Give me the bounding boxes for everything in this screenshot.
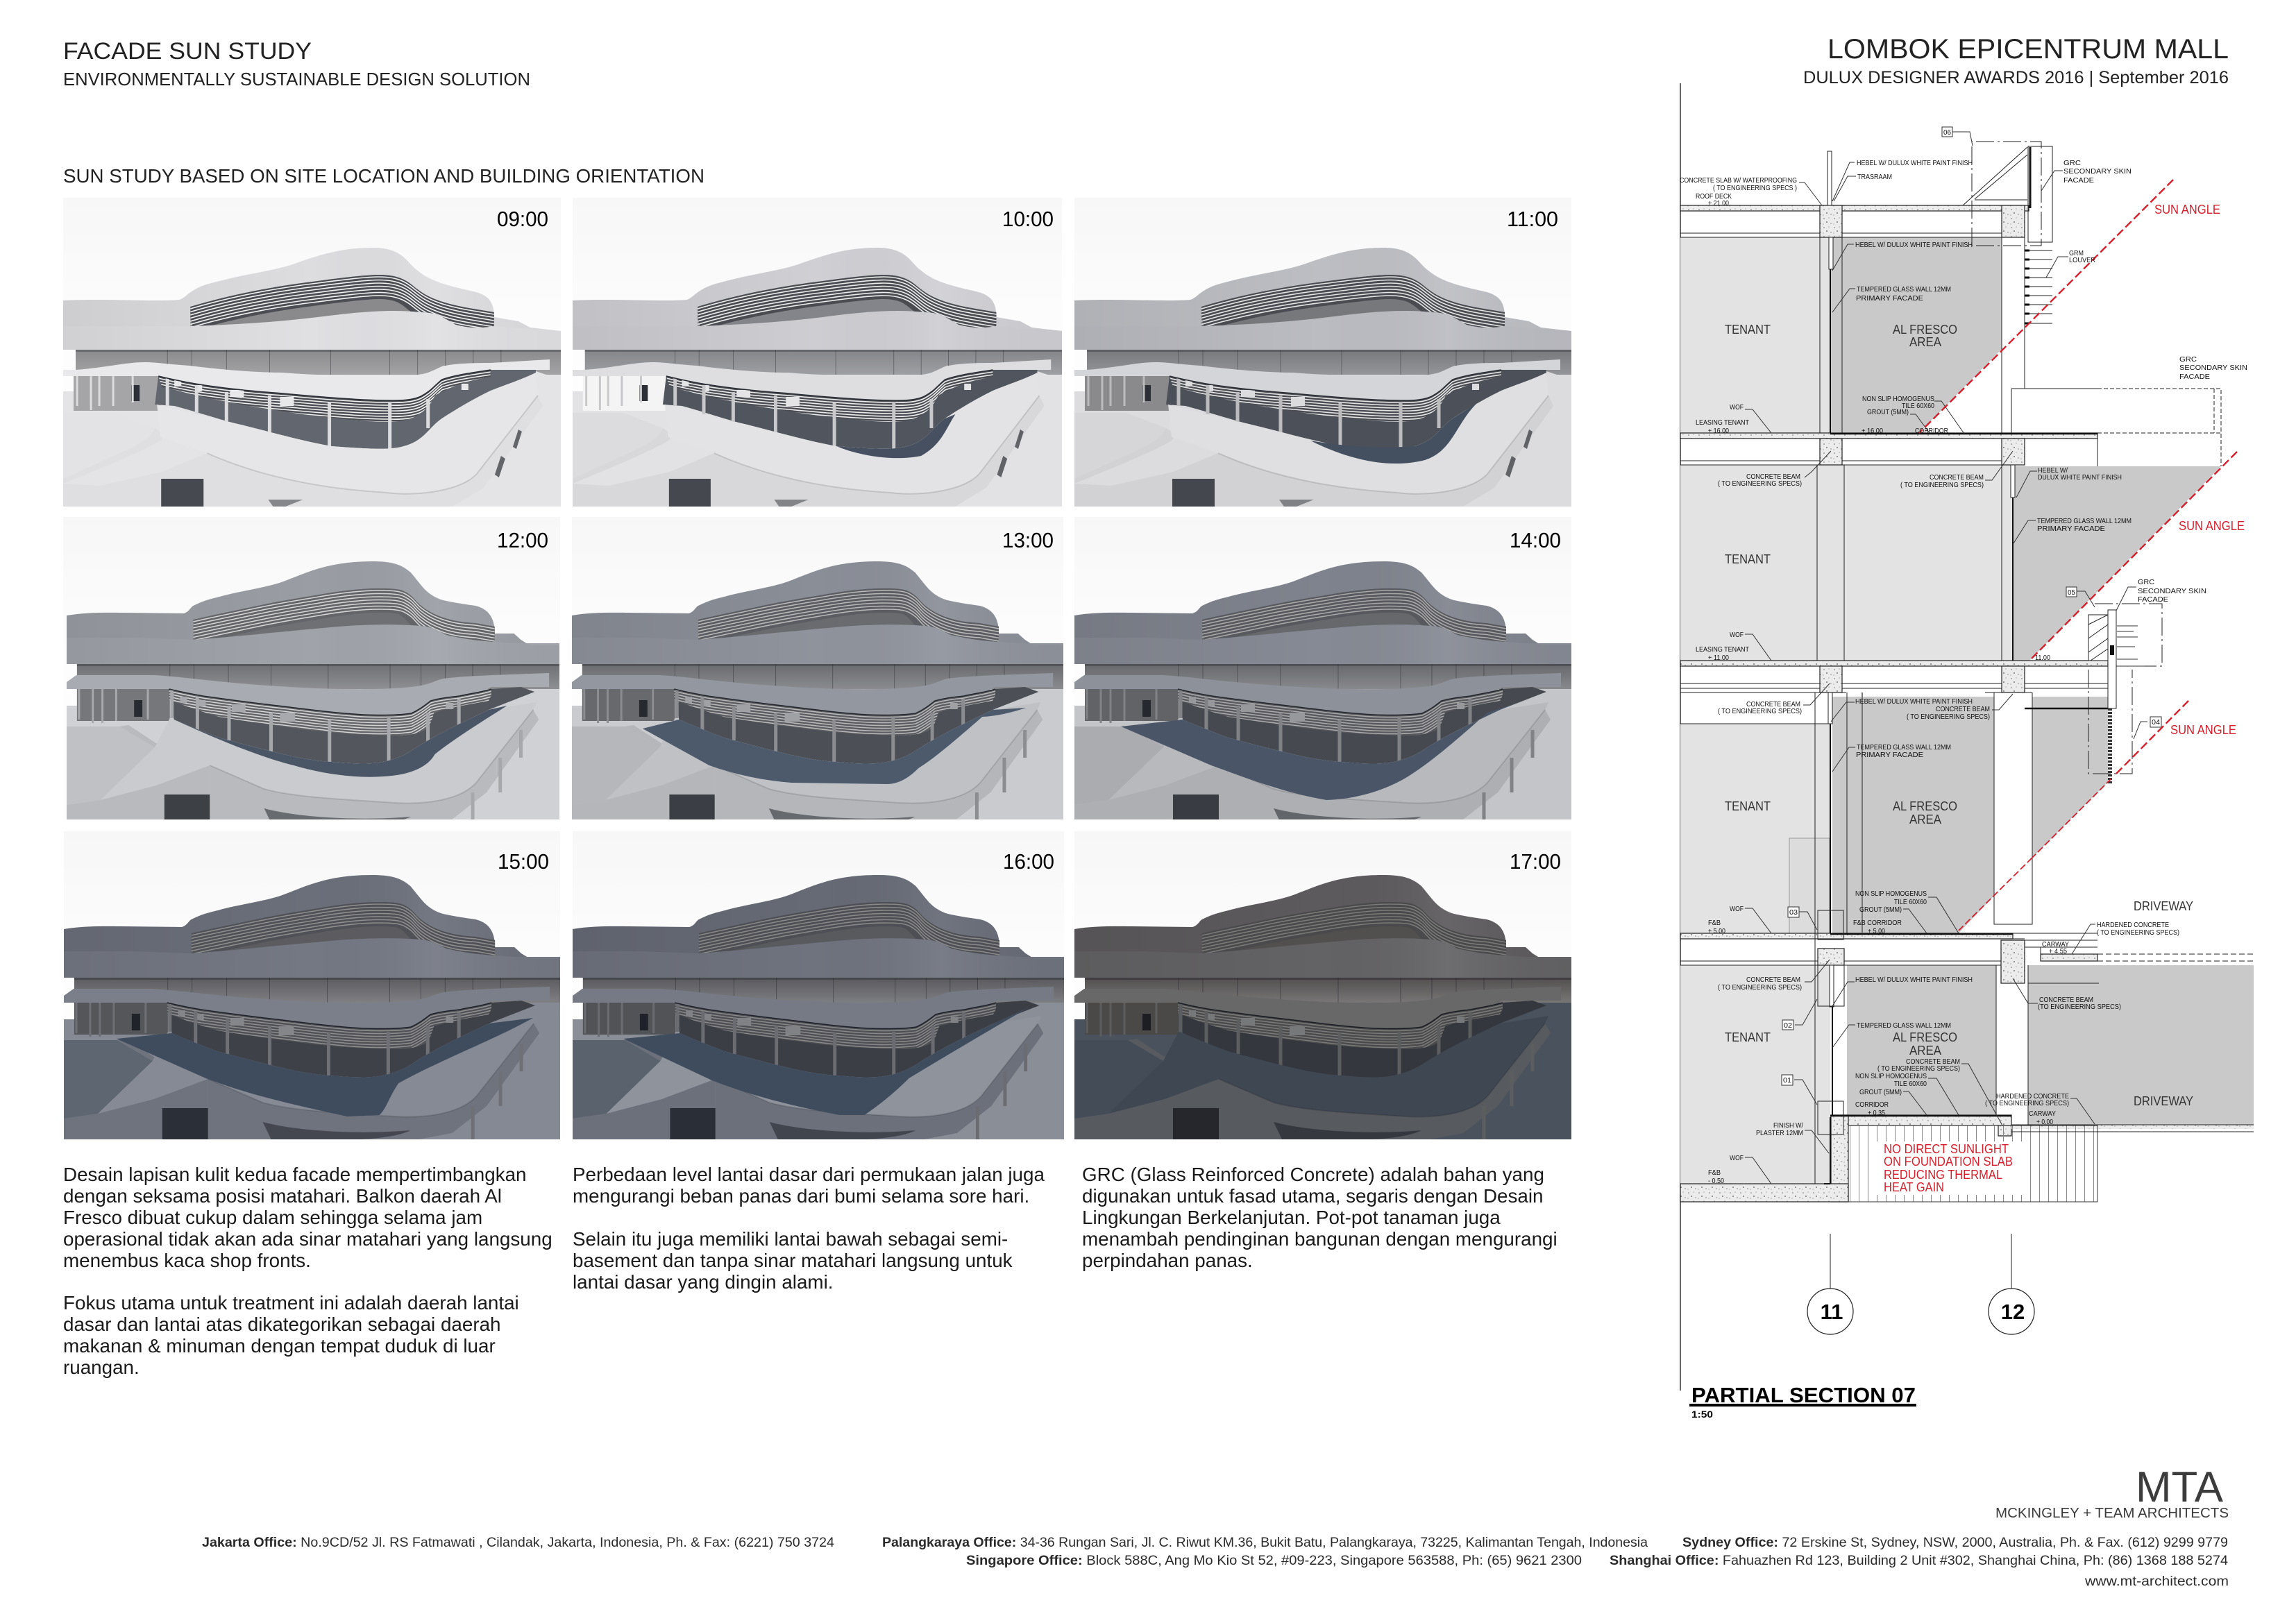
- panel: render 17:00: 17:00: [1510, 849, 1561, 874]
- title: facade sun study: [63, 38, 530, 90]
- logo: MTA: [1995, 1463, 2229, 1521]
- big space labels: DRIVEWAY: [2134, 899, 2193, 913]
- footer: office addresses: www.mt-architect.com: [2084, 1574, 2229, 1589]
- annotation labels: WOF: [1730, 1155, 1744, 1162]
- text block: column 1: dasar dan lantai atas dikategorikan sebagai daerah: [63, 1314, 501, 1335]
- annotation labels: + 21.00: [1708, 200, 1729, 207]
- annotation labels: GRC: [2179, 356, 2197, 364]
- title: project name and award: DULUX DESIGNER AWARDS 2016 | September 2016: [1803, 68, 2229, 87]
- panel: render 11:00: [1074, 198, 1571, 507]
- annotation labels: + 0.00: [2036, 1119, 2053, 1126]
- red note: [1884, 1142, 2013, 1194]
- annotation labels: HARDENED CONCRETE: [2097, 921, 2169, 929]
- annotation labels: CONCRETE SLAB W/ WATERPROOFING: [1680, 177, 1797, 185]
- text block: column 2: Selain itu juga memiliki lantai bawah sebagai semi-: [573, 1228, 1008, 1250]
- text block: column 3: digunakan untuk fasad utama, segaris dengan Desain: [1082, 1185, 1544, 1207]
- annotation labels: PRIMARY FACADE: [2037, 525, 2105, 533]
- annotation labels: + 16.00: [1862, 427, 1883, 435]
- big space labels: TENANT: [1725, 552, 1771, 566]
- annotation labels: HEBEL W/ DULUX WHITE PAINT FINISH: [1855, 698, 1973, 706]
- title: facade sun study: FACADE SUN STUDY: [63, 38, 312, 65]
- annotation labels: ( TO ENGINEERING SPECS): [1985, 1100, 2069, 1107]
- annotation labels: TILE 60X60: [1902, 402, 1934, 410]
- annotation labels: GROUT (5MM): [1859, 1089, 1902, 1096]
- annotation labels: NON SLIP HOMOGENUS: [1862, 396, 1934, 403]
- annotation labels: + 11.00: [1708, 654, 1729, 662]
- tag numbers: 03: [1789, 909, 1798, 917]
- big space labels: AL FRESCO: [1893, 1030, 1957, 1044]
- annotation labels: CONCRETE BEAM: [1746, 976, 1800, 984]
- big space labels: [1725, 323, 2193, 1108]
- hebel walls, GRC skin and louvers: [1827, 142, 2221, 1007]
- annotation labels: TEMPERED GLASS WALL 12MM: [1857, 744, 1951, 751]
- annotation labels: (TO ENGINEERING SPECS): [2038, 1003, 2121, 1011]
- annotation labels: F&B CORRIDOR: [1853, 919, 1902, 927]
- panel: render 14:00: 14:00: [1510, 528, 1561, 552]
- annotation labels: TILE 60X60: [1894, 899, 1927, 906]
- text block: column 1: menembus kaca shop fronts.: [63, 1250, 311, 1271]
- annotation labels: ( TO ENGINEERING SPECS): [1907, 713, 1990, 721]
- tag numbers: 04: [2152, 719, 2160, 726]
- logo: MTA: MCKINGLEY + TEAM ARCHITECTS: [1995, 1506, 2229, 1521]
- title: project name and award: [1803, 34, 2229, 87]
- panel: render 16:00: 16:00: [1003, 849, 1054, 874]
- text block: column 2: lantai dasar yang dingin alami.: [573, 1271, 833, 1293]
- big space labels: AL FRESCO: [1893, 323, 1957, 337]
- annotation labels: FACADE: [2138, 596, 2168, 604]
- annotation labels: CONCRETE BEAM: [1936, 706, 1990, 713]
- panel: render 12:00: 12:00: [497, 528, 548, 552]
- lower sun angle line: [1959, 779, 2111, 931]
- big space labels: DRIVEWAY: [2134, 1094, 2193, 1108]
- annotation labels: F&B: [1708, 919, 1721, 927]
- annotation labels: WOF: [1730, 631, 1744, 639]
- text block: column 3: GRC (Glass Reinforced Concrete) adalah bahan yang: [1082, 1164, 1544, 1185]
- annotation labels: FACADE: [2179, 373, 2210, 381]
- chart: partial section drawing: [1680, 83, 2254, 1391]
- big space labels: TENANT: [1725, 1030, 1771, 1044]
- text block: column 1: Desain lapisan kulit kedua facade mempertimbangkan: [63, 1164, 527, 1185]
- panel: render 13:00: [572, 517, 1063, 827]
- red note: ON FOUNDATION SLAB: [1884, 1155, 2013, 1169]
- text block: column 1: dengan seksama posisi matahari. Balkon daerah Al: [63, 1185, 502, 1207]
- structural lines: [1680, 233, 2254, 1184]
- footer: office addresses: Singapore Office: Block 588C, Ang Mo Kio St 52, #09-223, Singapore 563588, Ph: (65) 9621 2300: [966, 1554, 1582, 1568]
- panel: render 17:00: [1074, 831, 1571, 1141]
- big space labels: TENANT: [1725, 799, 1771, 813]
- text block: column 3: Lingkungan Berkelanjutan. Pot-pot tanaman juga: [1082, 1207, 1501, 1228]
- annotation labels: NON SLIP HOMOGENUS: [1855, 890, 1927, 898]
- red sun angle labels: SUN ANGLE: [2170, 723, 2236, 737]
- footer: office addresses: Jakarta Office: No.9CD/52 Jl. RS Fatmawati , Cilandak, Jakarta, Indonesia, Ph. & Fax: (6221) 750 3724: [202, 1536, 834, 1550]
- annotation labels: PRIMARY FACADE: [1856, 295, 1923, 303]
- annotation labels: DULUX WHITE PAINT FINISH: [2038, 474, 2122, 482]
- grid bubble 12: 12: [2001, 1300, 2025, 1324]
- annotation labels: CONCRETE BEAM: [2039, 996, 2093, 1004]
- leaders: [1745, 132, 2147, 1184]
- annotation labels: PLASTER 12MM: [1756, 1130, 1803, 1137]
- footer: office addresses: Sydney Office: 72 Erskine St, Sydney, NSW, 2000, Australia, Ph. & Fax. (612) 9299 9779: [1682, 1536, 2228, 1550]
- grid bubble 11: [1807, 1234, 1853, 1334]
- drawing title: 1:50: [1691, 1409, 1713, 1420]
- annotation labels: GROUT (5MM): [1859, 906, 1902, 914]
- annotation labels: + 0.35: [1868, 1110, 1885, 1117]
- footer: office addresses: [202, 1536, 2229, 1589]
- big space labels: AL FRESCO: [1893, 799, 1957, 813]
- panel: render 10:00: 10:00: [1002, 207, 1054, 231]
- annotation labels: ROOF DECK: [1696, 193, 1732, 201]
- annotation labels: LEASING TENANT: [1696, 646, 1749, 654]
- footer: office addresses: Palangkaraya Office: 34-36 Rungan Sari, Jl. C. Riwut KM.36, Bukit Batu, Palangkaraya, 73225, Kalimantan Tengah, Indonesia: [882, 1536, 1648, 1550]
- panel: render 14:00: [1074, 517, 1571, 827]
- red note: HEAT GAIN: [1884, 1180, 1944, 1194]
- annotation labels: LEASING TENANT: [1696, 419, 1749, 427]
- text block: column 1: operasional tidak akan ada sinar matahari yang langsung: [63, 1228, 552, 1250]
- annotation labels: WOF: [1730, 404, 1744, 411]
- annotation labels: CARWAY: [2029, 1110, 2056, 1118]
- concrete slabs and beams: [1680, 205, 2254, 1202]
- tags: [1782, 127, 2161, 1085]
- red sun angle labels: SUN ANGLE: [2154, 203, 2220, 216]
- big space labels: TENANT: [1725, 323, 1771, 337]
- title: project name and award: LOMBOK EPICENTRUM MALL: [1827, 34, 2229, 65]
- annotation labels: HEBEL W/ DULUX WHITE PAINT FINISH: [1855, 241, 1973, 249]
- annotation labels: F&B: [1708, 1169, 1721, 1177]
- panel: render 16:00: [573, 831, 1064, 1141]
- annotation labels: GROUT (5MM): [1867, 409, 1909, 416]
- annotation labels: GRC: [2063, 160, 2081, 167]
- annotation labels: ( TO ENGINEERING SPECS): [1718, 984, 1802, 992]
- annotation labels: - 0.50: [1708, 1178, 1724, 1185]
- panel: render 09:00: [63, 198, 561, 507]
- grid bubble 11: 11: [1821, 1300, 1843, 1324]
- panel: render 11:00: 11:00: [1507, 207, 1558, 231]
- text block: column 1: [63, 1164, 552, 1378]
- text block: column 3: [1082, 1164, 1558, 1271]
- annotation labels: ( TO ENGINEERING SPECS): [1900, 482, 1984, 489]
- annotation labels: FACADE: [2063, 177, 2094, 185]
- annotation labels: CONCRETE BEAM: [1906, 1058, 1960, 1066]
- text block: column 3: menambah pendinginan bangunan dengan mengurangi: [1082, 1228, 1558, 1250]
- annotation labels: HEBEL W/ DULUX WHITE PAINT FINISH: [1857, 160, 1973, 167]
- footer: office addresses: Shanghai Office: Fahuazhen Rd 123, Building 2 Unit #302, Shanghai China, Ph: (86) 1368 188 5274: [1610, 1554, 2228, 1568]
- annotation labels: CONCRETE BEAM: [1746, 701, 1800, 708]
- text block: column 1: Fresco dibuat cukup dalam sehingga selama jam: [63, 1207, 482, 1228]
- annotation labels: [1680, 160, 2247, 1185]
- big space labels: AREA: [1909, 813, 1941, 826]
- annotation labels: SECONDARY SKIN: [2179, 364, 2247, 372]
- tag numbers: 02: [1784, 1022, 1792, 1030]
- annotation labels: TEMPERED GLASS WALL 12MM: [1857, 1022, 1951, 1030]
- tag numbers: 01: [1783, 1077, 1791, 1085]
- annotation labels: 11.00: [2035, 654, 2050, 662]
- panel: render 12:00: [63, 517, 560, 827]
- annotation labels: GRM: [2069, 250, 2084, 257]
- annotation labels: SECONDARY SKIN: [2138, 588, 2206, 595]
- annotation labels: GRC: [2138, 579, 2154, 586]
- annotation labels: SECONDARY SKIN: [2063, 168, 2132, 176]
- annotation labels: TRASRAAM: [1857, 173, 1892, 181]
- red sun angle labels: SUN ANGLE: [2179, 519, 2245, 533]
- text block: column 2: mengurangi beban panas dari bumi selama sore hari.: [573, 1185, 1029, 1207]
- annotation labels: CARWAY: [2042, 941, 2069, 949]
- annotation labels: HEBEL W/ DULUX WHITE PAINT FINISH: [1855, 976, 1973, 984]
- text block: column 1: makanan & minuman dengan tempat duduk di luar: [63, 1335, 496, 1357]
- panel: render 15:00: 15:00: [498, 849, 549, 874]
- annotation labels: CORRIDOR: [1855, 1101, 1889, 1109]
- annotation labels: TEMPERED GLASS WALL 12MM: [1857, 286, 1951, 294]
- panel: render 13:00: 13:00: [1002, 528, 1054, 552]
- text block: column 2: [573, 1164, 1045, 1293]
- drawing title: [1689, 1383, 1916, 1420]
- logo: MTA: MTA: [2136, 1463, 2224, 1511]
- annotation labels: CONCRETE BEAM: [1930, 474, 1984, 482]
- panel: render 10:00: [573, 198, 1062, 507]
- annotation labels: LOUVER: [2069, 257, 2095, 264]
- red note: REDUCING THERMAL: [1884, 1168, 2002, 1182]
- annotation labels: CONCRETE BEAM: [1746, 473, 1800, 481]
- title: facade sun study: ENVIRONMENTALLY SUSTAINABLE DESIGN SOLUTION: [63, 69, 530, 90]
- text block: column 1: ruangan.: [63, 1357, 140, 1378]
- callout boxes: [1818, 910, 1844, 1135]
- annotation labels: ( TO ENGINEERING SPECS): [1718, 480, 1802, 488]
- drawing title: PARTIAL SECTION 07: [1691, 1383, 1916, 1407]
- tag numbers: 05: [2068, 589, 2075, 597]
- big space labels: AREA: [1909, 1044, 1941, 1057]
- fills: tenant and al fresco shading: [1680, 237, 2254, 1184]
- panel: render 09:00: 09:00: [497, 207, 548, 231]
- annotation labels: PRIMARY FACADE: [1856, 751, 1923, 759]
- annotation labels: + 4.55: [2049, 948, 2067, 955]
- heading: sun study subtitle: SUN STUDY BASED ON SITE LOCATION AND BUILDING ORIENTATION: [63, 165, 704, 187]
- red sun angle labels: [2154, 203, 2245, 737]
- annotation labels: ( TO ENGINEERING SPECS): [1877, 1065, 1960, 1073]
- annotation labels: ( TO ENGINEERING SPECS): [1718, 708, 1802, 715]
- annotation labels: TILE 60X60: [1894, 1080, 1927, 1088]
- annotation labels: + 16.00: [1708, 427, 1729, 435]
- red note: NO DIRECT SUNLIGHT: [1884, 1142, 2009, 1156]
- grid bubble 12: [1989, 1234, 2034, 1334]
- panel: render 15:00: [64, 831, 560, 1141]
- text block: column 1: Fokus utama untuk treatment ini adalah daerah lantai: [63, 1292, 519, 1314]
- annotation labels: NON SLIP HOMOGENUS: [1855, 1073, 1927, 1080]
- annotation labels: FINISH W/: [1773, 1122, 1803, 1130]
- text block: column 3: perpindahan panas.: [1082, 1250, 1253, 1271]
- sun angle lines: [1919, 180, 2237, 774]
- annotation labels: + 5.00: [1868, 928, 1885, 935]
- annotation labels: CORRIDOR: [1915, 427, 1948, 435]
- annotation labels: TEMPERED GLASS WALL 12MM: [2037, 518, 2132, 525]
- tag numbers: 06: [1943, 129, 1951, 137]
- annotation labels: ( TO ENGINEERING SPECS): [2097, 929, 2179, 937]
- text block: column 2: Perbedaan level lantai dasar dari permukaan jalan juga: [573, 1164, 1045, 1185]
- big space labels: AREA: [1909, 335, 1941, 349]
- annotation labels: HARDENED CONCRETE: [1996, 1093, 2069, 1101]
- foundation hatch: [1848, 1125, 2097, 1202]
- text block: column 2: basement dan tanpa sinar matahari langsung untuk: [573, 1250, 1013, 1271]
- tag numbers: [1783, 129, 2160, 1085]
- annotation labels: + 5.00: [1708, 928, 1725, 935]
- annotation labels: ( TO ENGINEERING SPECS ): [1713, 185, 1797, 192]
- annotation labels: HEBEL W/: [2038, 467, 2068, 475]
- annotation labels: WOF: [1730, 906, 1744, 913]
